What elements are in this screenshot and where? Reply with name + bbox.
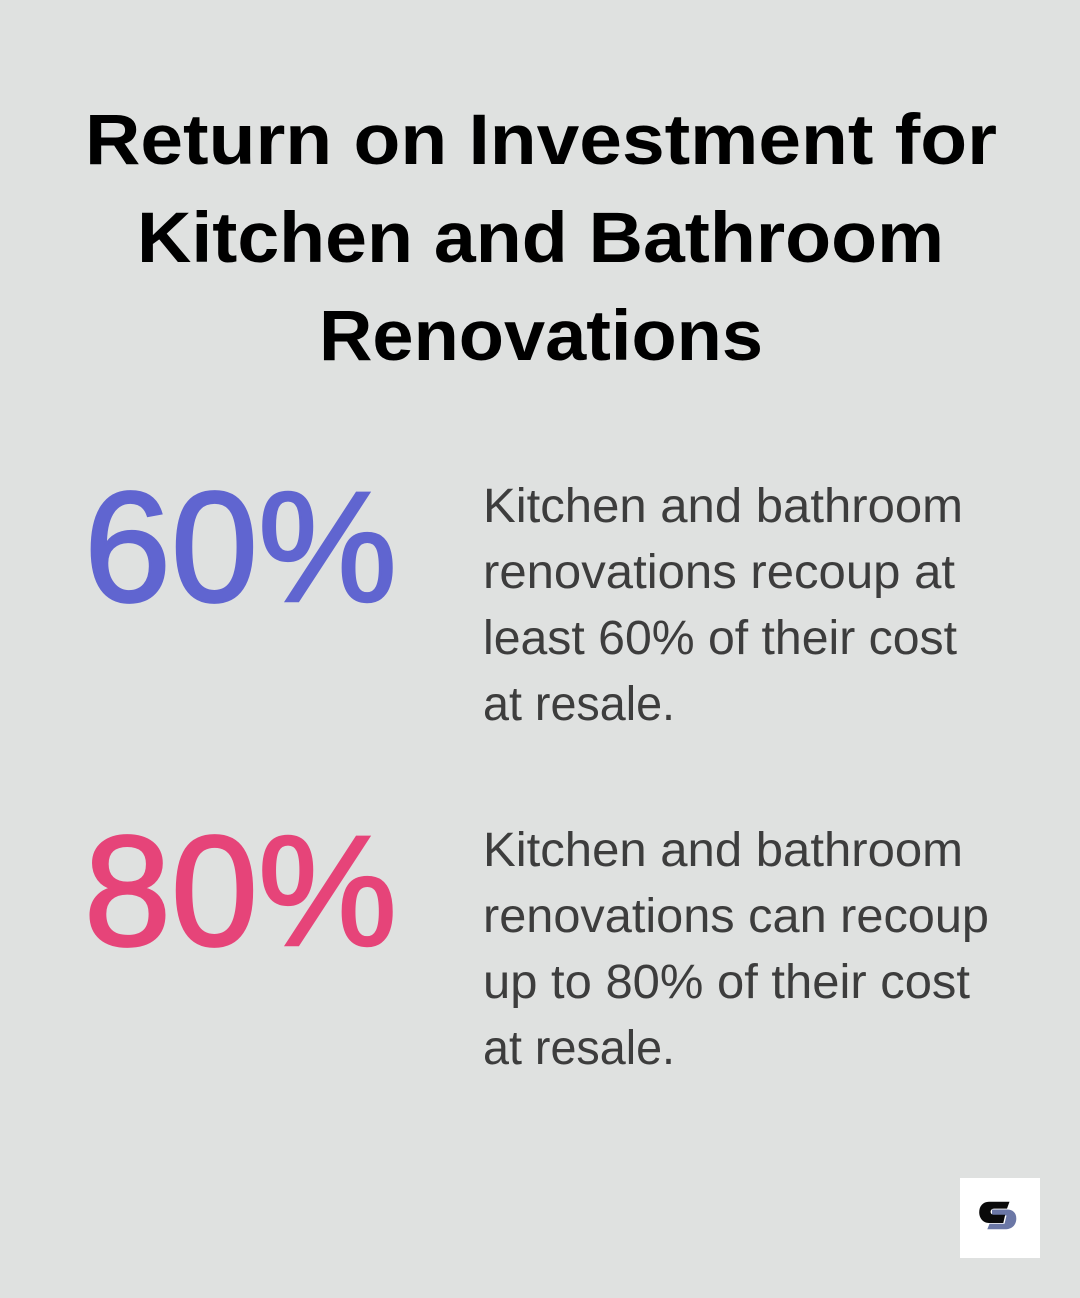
text block: 80% description: at resale. — [483, 1022, 675, 1075]
title: Kitchen and Bathroom — [137, 199, 944, 278]
text block: 80% description: up to 80% of their cost — [483, 956, 970, 1009]
text block: 60% description: at resale. — [483, 678, 675, 731]
title: Renovations — [319, 297, 763, 376]
text block: 80% description: Kitchen and bathroom — [483, 824, 963, 877]
text block: 60% description: Kitchen and bathroom — [483, 480, 963, 533]
title: Return on Investment for — [85, 101, 997, 180]
text block: 80% description: renovations can recoup — [483, 890, 989, 943]
statistic: 80%: 80% — [84, 804, 397, 979]
title — [85, 101, 997, 376]
text block: 60% description: least 60% of their cost — [483, 612, 957, 665]
text block: 60% description — [483, 480, 963, 731]
logo badge — [960, 1178, 1040, 1258]
text block: 60% description: renovations recoup at — [483, 546, 955, 599]
statistic: 60%: 60% — [84, 460, 397, 635]
text block: 80% description — [483, 824, 989, 1075]
